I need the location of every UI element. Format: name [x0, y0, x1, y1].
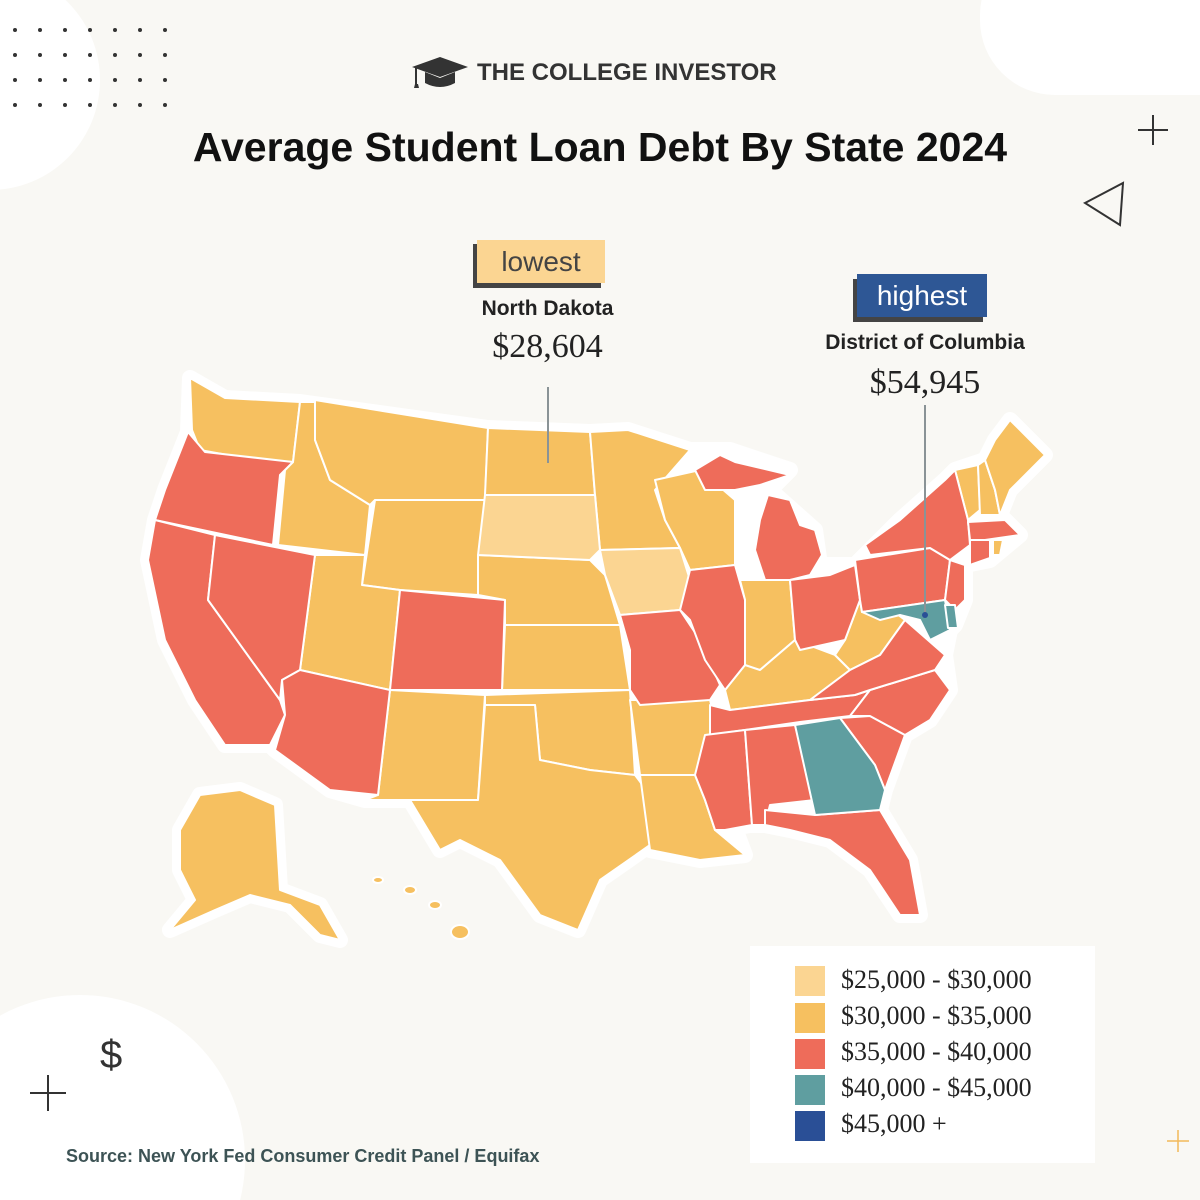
callout: highest: District of Columbia: [825, 331, 1025, 354]
legend: $35,000 - $40,000: [841, 1037, 1032, 1066]
light states: [478, 495, 690, 615]
yellow states: [170, 378, 1045, 940]
title: Average Student Loan Debt By State 2024: [193, 124, 1007, 170]
icon: DC: [922, 612, 928, 618]
source: Source: New York Fed Consumer Credit Panel / Equifax: [66, 1146, 539, 1166]
legend: $45,000 +: [841, 1109, 947, 1138]
callout: lowest: North Dakota: [482, 297, 613, 320]
callout: highest: highest: [877, 280, 967, 311]
red states: [148, 432, 1020, 915]
callout: lowest: lowest: [501, 246, 581, 277]
legend: [750, 946, 1095, 1163]
callout: highest: [825, 274, 1025, 401]
legend: $25,000 - $30,000: [841, 965, 1032, 994]
teal states: [795, 600, 958, 815]
callout: lowest: $28,604: [492, 328, 603, 365]
icon: graduation cap: [412, 57, 468, 88]
callout: lowest: [473, 240, 614, 365]
callout line ND: [547, 387, 549, 463]
legend: $40,000 - $45,000: [841, 1073, 1032, 1102]
legend: $30,000 - $35,000: [841, 1001, 1032, 1030]
callout: highest: $54,945: [870, 364, 980, 401]
icon: dollar sign: $: [100, 1033, 122, 1077]
callout line DC: [924, 405, 926, 612]
logo: THE COLLEGE INVESTOR: [477, 59, 777, 86]
